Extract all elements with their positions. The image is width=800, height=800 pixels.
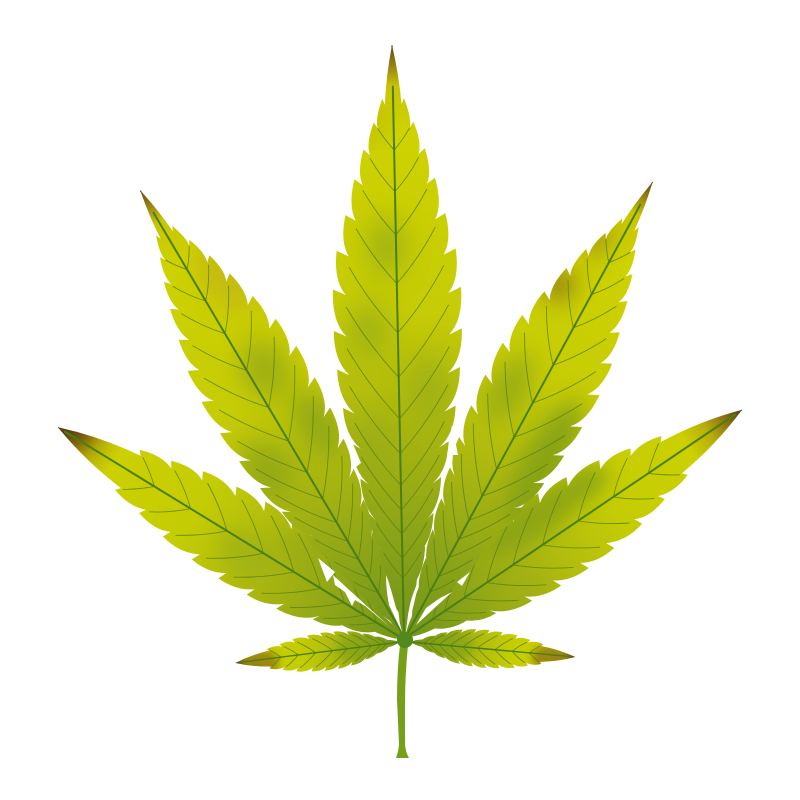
midrib	[393, 87, 404, 638]
leaflet: lower left	[58, 427, 400, 639]
leaf illustration	[58, 45, 742, 758]
midrib	[405, 414, 735, 638]
midrib	[240, 642, 400, 662]
leaflet: lower right	[410, 410, 742, 637]
midrib	[65, 432, 405, 640]
white gaps between leaflets	[318, 425, 470, 632]
leaflet: upper left	[140, 190, 402, 634]
leaflet: center	[332, 45, 462, 632]
midrib	[410, 642, 570, 657]
stem node	[397, 632, 413, 648]
leaflet: bottom right	[412, 629, 576, 668]
midrib	[405, 205, 640, 638]
leaflet: bottom left	[235, 631, 398, 672]
stem	[396, 645, 409, 758]
midrib	[154, 213, 405, 638]
leaflet: upper right	[406, 182, 653, 633]
